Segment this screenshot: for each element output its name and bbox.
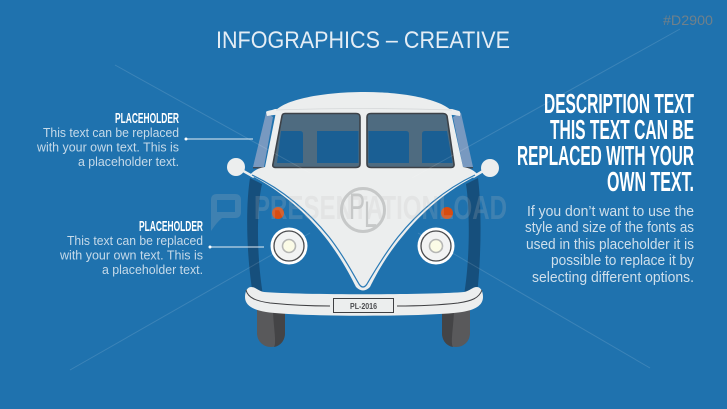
left callout 2 bbox=[59, 218, 203, 277]
callout 1 body text: with your own text. This is bbox=[36, 140, 179, 154]
van illustration bbox=[227, 92, 499, 347]
left callout 1 bbox=[36, 110, 179, 169]
description body text: If you don’t want to use the bbox=[527, 204, 694, 220]
watermark logo bbox=[211, 189, 507, 231]
right body side shading bbox=[464, 178, 481, 295]
left side window bbox=[253, 113, 273, 167]
right headlight bbox=[418, 228, 454, 264]
callout 1 body text: a placeholder text. bbox=[78, 154, 179, 169]
description body text: used in this placeholder it is bbox=[526, 237, 694, 253]
bumper bbox=[245, 287, 483, 316]
white cab and V front bbox=[250, 112, 478, 290]
licence plate: PL-2016 bbox=[350, 302, 377, 311]
description body text bbox=[525, 204, 695, 286]
watermark PL badge: L bbox=[364, 194, 377, 235]
right mirror bbox=[481, 159, 499, 177]
right windscreen bbox=[367, 114, 454, 168]
connector line 2 bbox=[208, 246, 264, 248]
watermark wordmark: PRESENTATIONLOAD bbox=[254, 189, 507, 226]
callout 2 body text: a placeholder text. bbox=[102, 262, 203, 277]
callout 1 heading: PLACEHOLDER bbox=[115, 110, 179, 127]
right indicator bbox=[441, 207, 453, 219]
left indicator bbox=[272, 207, 284, 219]
title: INFOGRAPHICS – CREATIVE bbox=[216, 27, 510, 54]
callout 2 heading: PLACEHOLDER bbox=[139, 218, 203, 235]
description body text: style and size of the fonts as bbox=[525, 220, 694, 236]
callout 2 body text bbox=[59, 233, 203, 277]
watermark PL badge bbox=[342, 186, 384, 235]
right side window bbox=[453, 113, 473, 167]
description body text: possible to replace it by bbox=[551, 253, 695, 269]
left windscreen bbox=[273, 114, 360, 168]
roof bbox=[274, 92, 453, 113]
colour code label: #D2900 bbox=[663, 12, 713, 28]
callout 1 body text bbox=[36, 125, 179, 169]
watermark icon bbox=[211, 194, 241, 231]
blue trim line bbox=[252, 175, 475, 287]
callout 2 body text: This text can be replaced bbox=[67, 233, 203, 248]
description body text: selecting different options. bbox=[532, 270, 694, 286]
right tyre bbox=[442, 308, 470, 347]
left headlight bbox=[270, 228, 308, 264]
roof rim bbox=[266, 108, 460, 116]
left mirror bbox=[227, 158, 245, 176]
bumper lines bbox=[246, 290, 482, 306]
left body side shading bbox=[247, 178, 263, 295]
licence plate bbox=[334, 298, 394, 312]
callout 2 body text: with your own text. This is bbox=[59, 248, 203, 262]
lower body bbox=[247, 172, 481, 296]
connector line 1 bbox=[184, 138, 253, 140]
callout 1 body text: This text can be replaced bbox=[43, 125, 179, 140]
description heading bbox=[517, 88, 694, 197]
mirror arms bbox=[238, 168, 488, 177]
watermark PL badge: P bbox=[349, 186, 365, 227]
left tyre bbox=[257, 308, 285, 347]
